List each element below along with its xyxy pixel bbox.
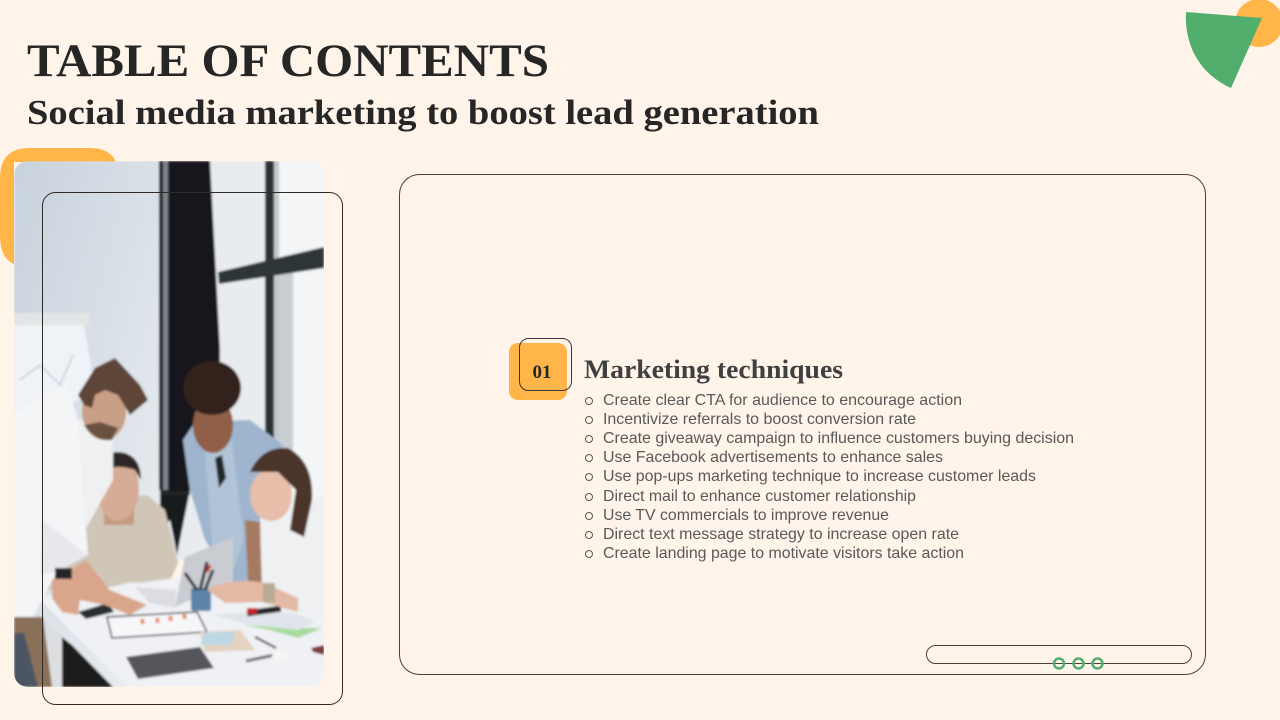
photo window <box>160 161 324 561</box>
list: marketing techniques: Create giveaway campaign to influence customers buying decision <box>603 430 1074 447</box>
list: marketing techniques <box>586 392 1074 562</box>
photo table <box>14 578 324 687</box>
photo laptop and cup <box>135 537 233 611</box>
icon: corner decoration <box>1186 0 1280 88</box>
photo standing man <box>14 358 148 617</box>
photo wall <box>14 161 164 687</box>
pagination bar <box>926 646 1192 668</box>
photo desk items <box>78 603 324 679</box>
list: marketing techniques: Use pop-ups marketing technique to increase customer leads <box>603 468 1036 485</box>
list: marketing techniques: Use TV commercials to improve revenue <box>603 507 889 524</box>
photo outline frame <box>42 192 342 704</box>
number badge <box>509 338 572 400</box>
list: marketing techniques: Create landing page to motivate visitors take action <box>603 545 964 562</box>
list: marketing techniques: Direct text message strategy to increase open rate <box>603 526 959 543</box>
number badge: 01 <box>532 362 552 383</box>
orange accent behind photo <box>0 148 116 264</box>
photo standing woman <box>183 361 283 585</box>
list: marketing techniques: Create clear CTA for audience to encourage action <box>603 392 962 409</box>
title: TABLE OF CONTENTS <box>27 35 549 87</box>
subtitle: Social media marketing to boost lead generation <box>27 93 819 132</box>
photo: team around a table <box>14 161 324 687</box>
list: marketing techniques: Direct mail to enhance customer relationship <box>603 488 916 505</box>
photo seated man <box>40 452 178 590</box>
list: marketing techniques: Use Facebook advertisements to enhance sales <box>603 449 943 466</box>
photo curtain <box>159 161 220 555</box>
photo flipchart <box>14 313 96 420</box>
section heading: Marketing techniques <box>584 355 843 384</box>
list: marketing techniques: Incentivize referrals to boost conversion rate <box>603 411 916 428</box>
photo right woman <box>207 448 324 613</box>
panel: contents frame <box>400 174 1206 674</box>
